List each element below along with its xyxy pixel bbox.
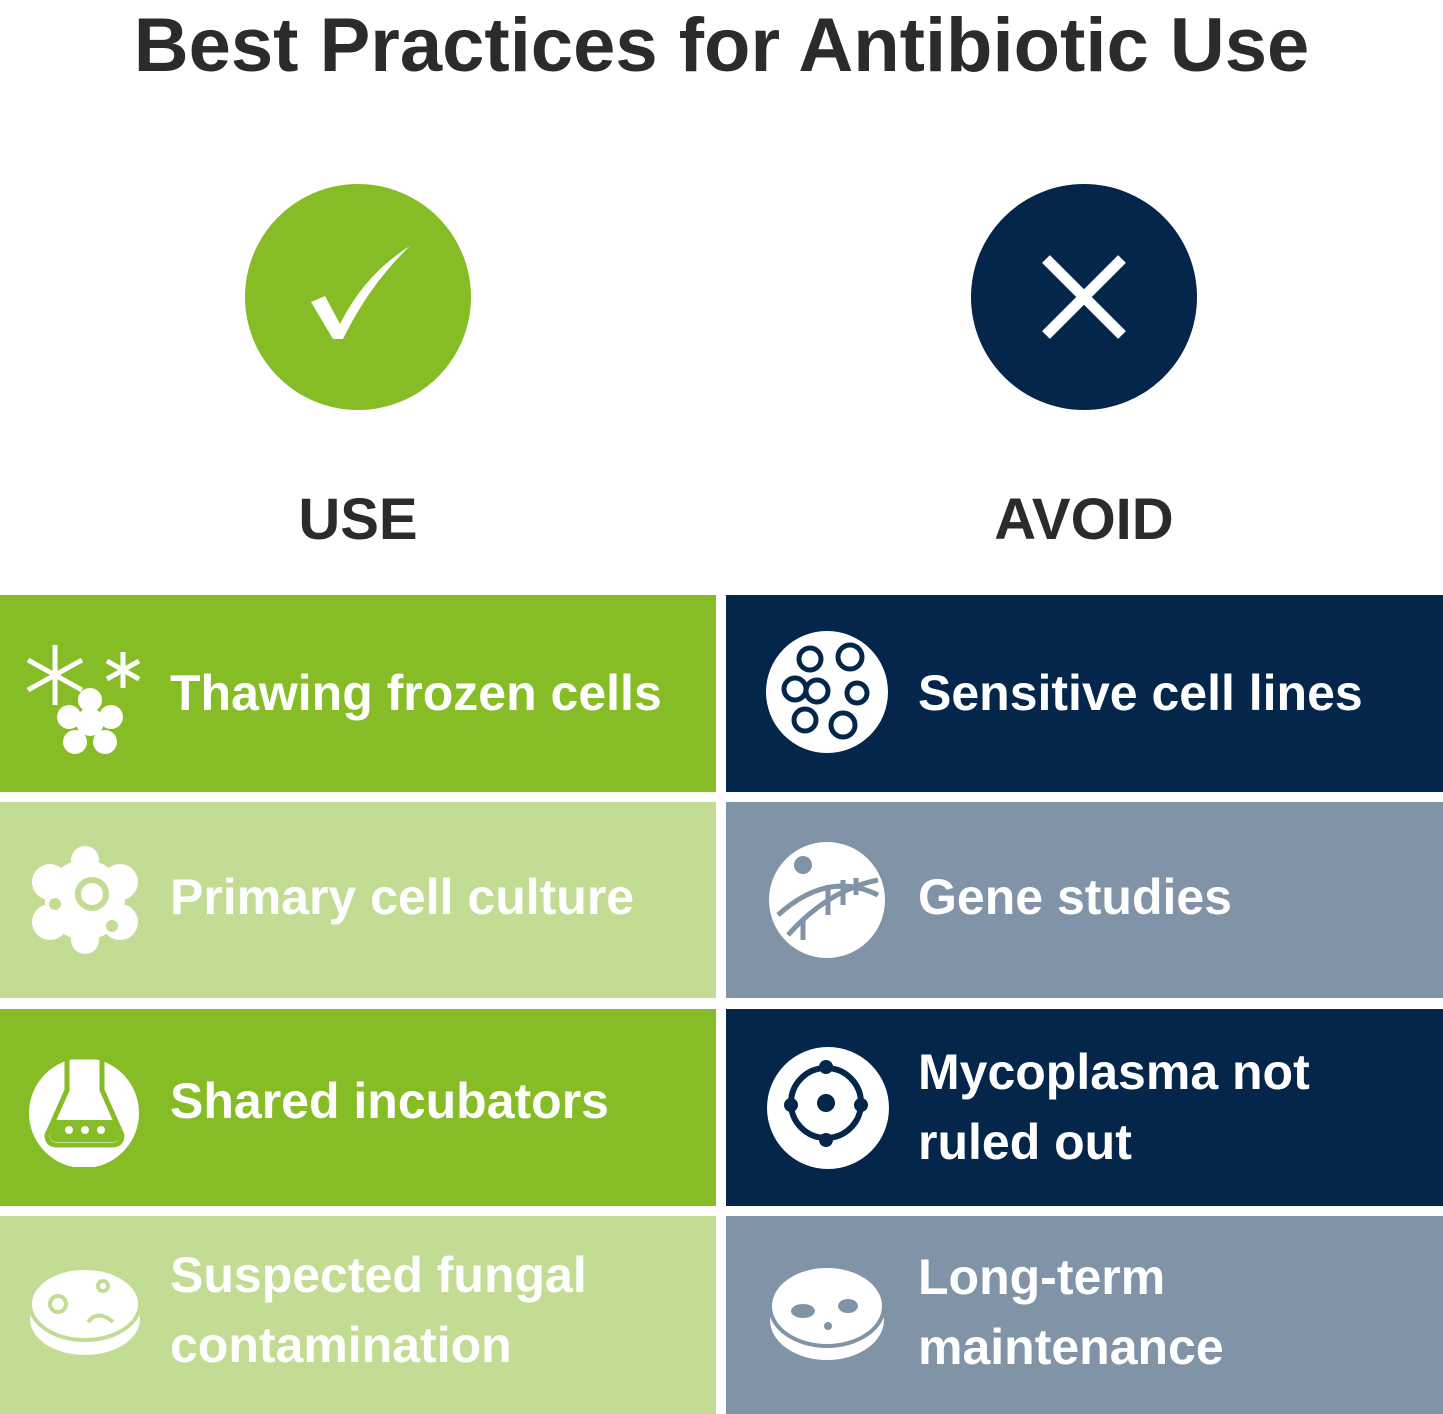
panel: primary cell culture <box>0 802 716 998</box>
icon: cell <box>32 846 138 954</box>
panel: fungal contamination <box>0 1216 716 1414</box>
panel: thawing frozen cells <box>0 595 716 792</box>
heading: AVOID: AVOID <box>994 487 1174 552</box>
title: Best Practices for Antibiotic Use <box>134 3 1309 88</box>
text <box>170 1247 587 1373</box>
text: Gene studies <box>918 869 1232 925</box>
text: Suspected fungal <box>170 1247 587 1303</box>
icon: x circle <box>971 184 1197 410</box>
panel: long-term maintenance <box>726 1216 1443 1414</box>
icon: check circle <box>245 184 471 410</box>
text: contamination <box>170 1317 512 1373</box>
heading: USE: USE <box>298 487 418 552</box>
text: Thawing frozen cells <box>170 665 662 721</box>
icon: target cell <box>767 1047 889 1169</box>
icon: petri dish <box>30 1270 140 1355</box>
icon: cells <box>766 631 888 753</box>
text: maintenance <box>918 1319 1224 1375</box>
text <box>918 1044 1310 1170</box>
text: Sensitive cell lines <box>918 665 1363 721</box>
text: ruled out <box>918 1114 1132 1170</box>
panel: gene studies <box>726 802 1443 998</box>
icon: dna <box>769 842 885 958</box>
text: Primary cell culture <box>170 869 634 925</box>
text: Shared incubators <box>170 1073 609 1129</box>
panel: mycoplasma <box>726 1009 1443 1206</box>
text: Long-term <box>918 1249 1165 1305</box>
panel: shared incubators <box>0 1009 716 1206</box>
text <box>918 1249 1224 1375</box>
icon: petri dish <box>770 1268 884 1360</box>
panel: sensitive cell lines <box>726 595 1443 792</box>
icon: snowflakes <box>26 645 140 754</box>
icon: flask <box>29 1060 139 1167</box>
text: Mycoplasma not <box>918 1044 1310 1100</box>
